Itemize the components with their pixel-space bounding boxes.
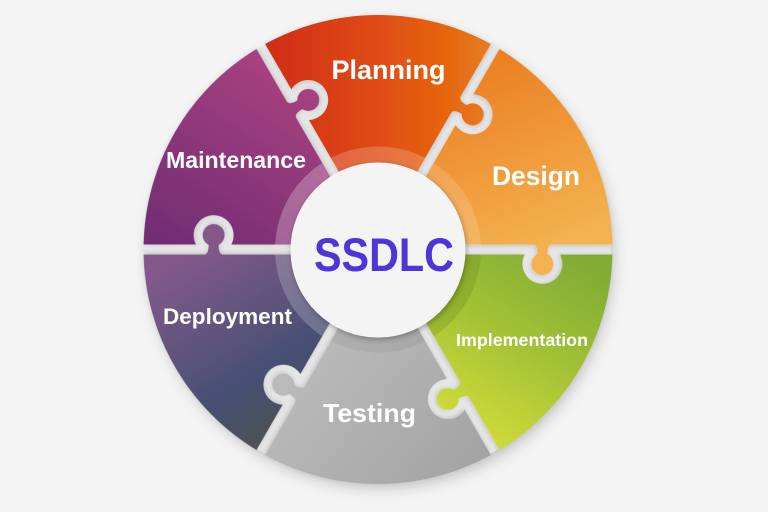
panel: Planning — [265, 15, 492, 173]
center disc with title — [290, 162, 466, 338]
wheel base shadow — [145, 16, 611, 482]
label: Maintenance: Maintenance — [166, 147, 306, 173]
label: Deployment: Deployment — [163, 304, 292, 329]
panel: Design — [425, 48, 613, 278]
label: Implementation: Implementation — [456, 330, 588, 350]
panel: Testing — [264, 327, 491, 484]
panel: Maintenance — [143, 48, 332, 246]
label: Testing: Testing — [323, 398, 416, 428]
panel: Deployment — [143, 222, 330, 450]
label: Planning: Planning — [332, 55, 446, 85]
panel: Implementation — [424, 253, 613, 450]
SSDLC puzzle wheel infographic — [141, 14, 620, 495]
title: SSDLC: SSDLC — [314, 228, 454, 281]
label: Design: Design — [492, 161, 580, 191]
